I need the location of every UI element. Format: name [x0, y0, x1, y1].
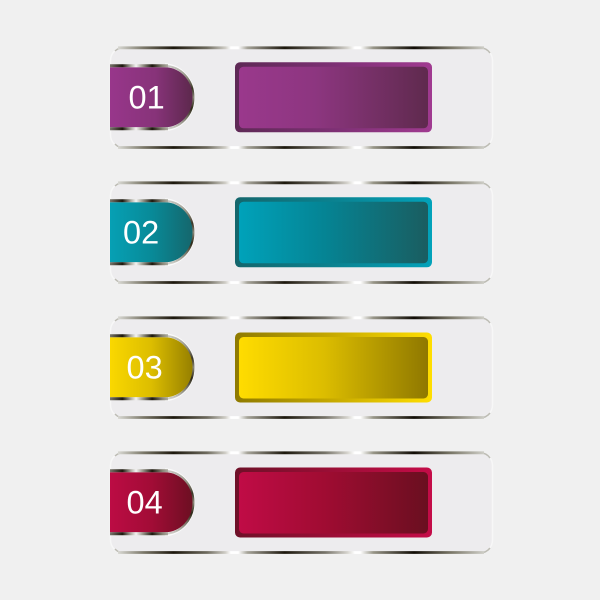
content bar 04 [235, 468, 432, 538]
number tab 02 [110, 200, 193, 264]
panel: row 01 [110, 48, 492, 148]
number tab 03: 03 [126, 350, 163, 386]
metallic corners 04 [115, 453, 490, 553]
metallic corners 02 [115, 183, 490, 283]
panel card 03 [110, 318, 492, 418]
panel: row 03 [110, 318, 492, 418]
panel: row 02 [110, 182, 492, 283]
number tab 02: 02 [123, 214, 159, 250]
content bar 02 [235, 197, 432, 267]
metallic top edge 04 [118, 451, 484, 454]
metallic top edge 02 [118, 181, 484, 184]
panel card 04 [110, 452, 492, 553]
metallic bottom edge 01 [118, 146, 484, 149]
metallic corners 01 [115, 48, 490, 148]
number tab 03 [110, 336, 194, 399]
content bar 01 [235, 62, 432, 132]
panel card 02 [110, 182, 492, 283]
panel: row 04 [110, 452, 492, 553]
metallic bottom edge 02 [118, 281, 484, 284]
panel card 01 [110, 48, 492, 148]
number tab 04: 04 [126, 484, 163, 520]
number tab 01: 01 [128, 80, 165, 116]
content bar 03 [235, 332, 432, 402]
number tab 01 [110, 66, 193, 129]
metallic bottom edge 04 [118, 551, 484, 554]
metallic corners 03 [115, 318, 490, 418]
number tab 04 [110, 470, 194, 534]
metallic top edge 01 [118, 46, 484, 49]
metallic bottom edge 03 [118, 416, 484, 419]
metallic top edge 03 [118, 316, 484, 319]
